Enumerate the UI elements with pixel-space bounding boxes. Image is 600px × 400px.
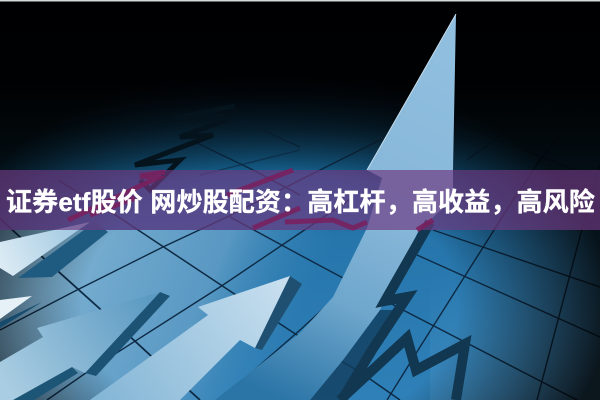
dark zigzag trend line <box>340 222 465 400</box>
shadow zigzag upper left <box>135 106 235 190</box>
title: 证券etf股价 网炒股配资：高杠杆，高收益，高风险 <box>6 187 595 217</box>
arrow: top-left <box>0 222 108 278</box>
purple title band <box>0 170 600 230</box>
big rising arrow <box>215 14 456 400</box>
crimson zigzag seen through band <box>68 170 433 230</box>
top edge stripe <box>0 0 600 2</box>
perspective grid lines <box>0 100 600 400</box>
arrow: middle <box>0 292 170 400</box>
arrow: lower centre <box>90 276 302 400</box>
arrow: small left <box>0 296 42 328</box>
